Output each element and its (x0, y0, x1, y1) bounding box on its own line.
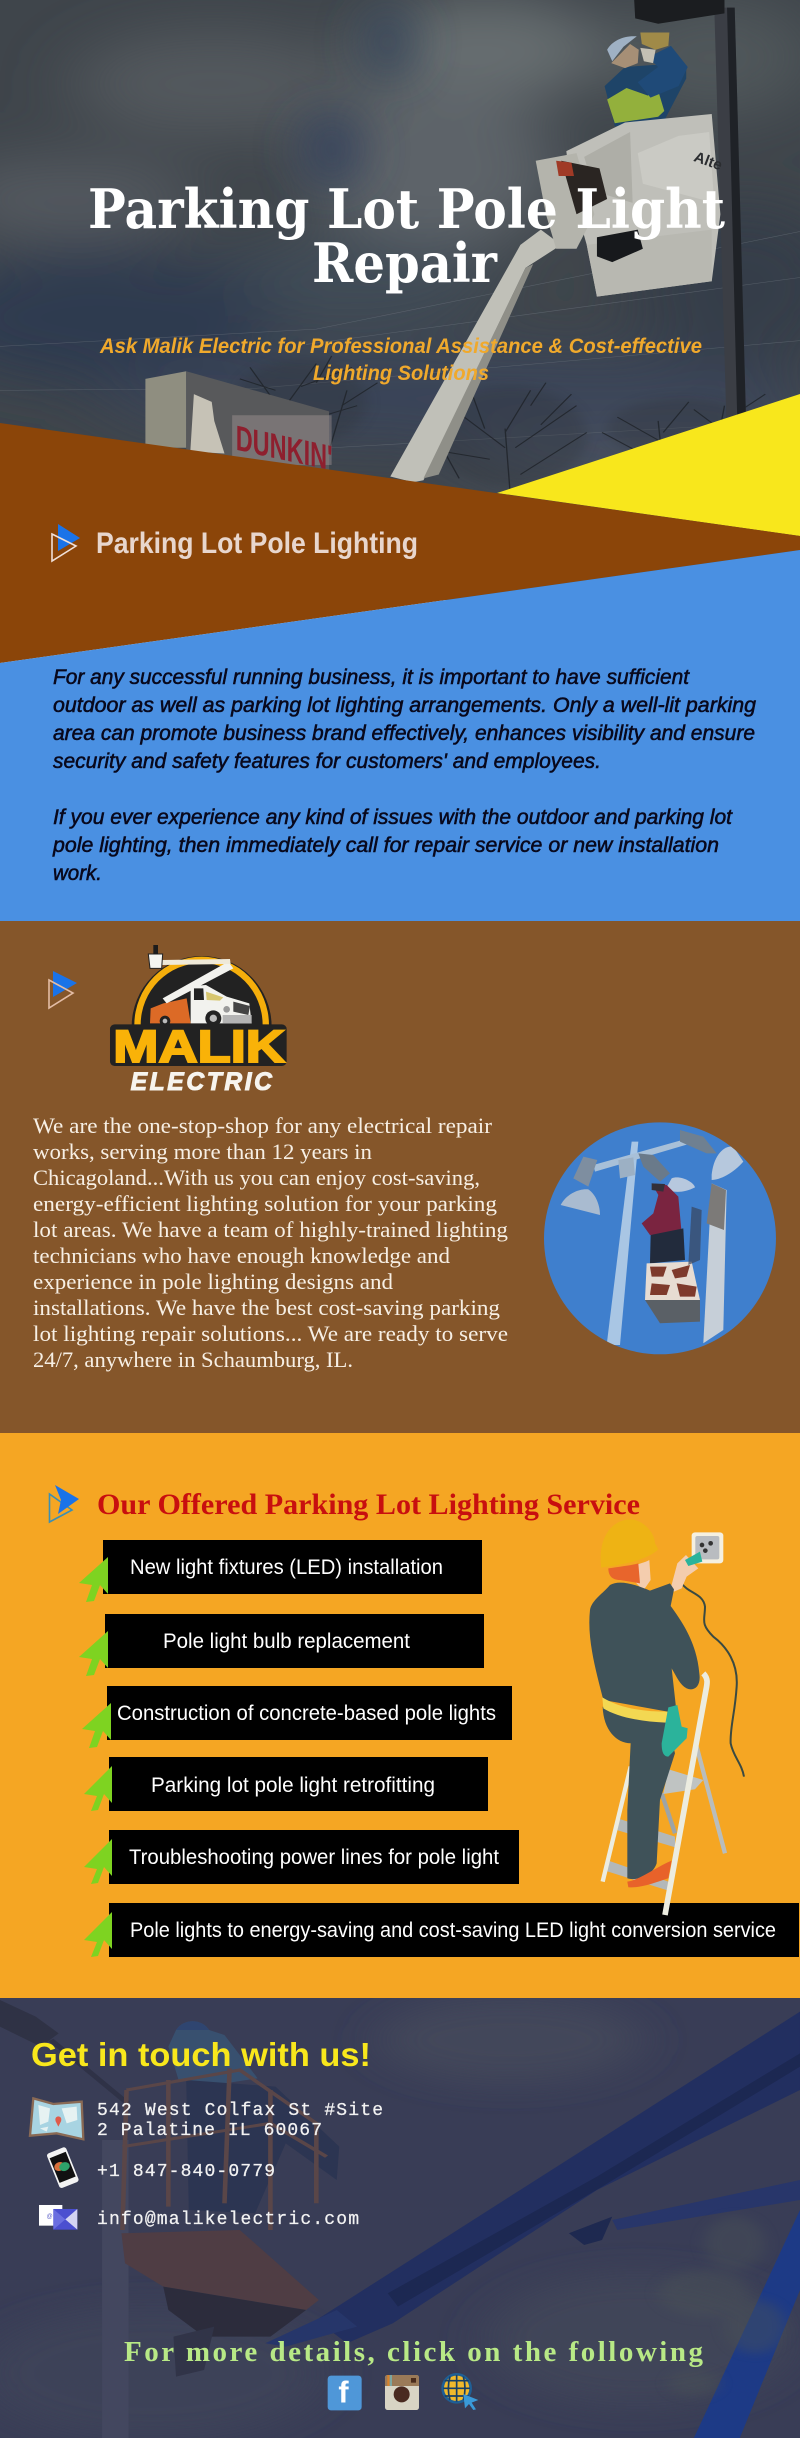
person (168, 2030, 258, 2083)
about text: works, serving more than 12 years in (33, 1139, 372, 1164)
subtitle: Ask Malik Electric for Professional Assistance & Cost-effective (99, 335, 702, 358)
icon: play arrow (50, 1485, 79, 1522)
wires (0, 232, 800, 448)
service item 2: Pole light bulb replacement (163, 1630, 410, 1653)
intro text: work. (53, 861, 102, 885)
social icons (328, 2373, 478, 2410)
outlet (692, 1532, 723, 1563)
subtitle: Lighting Solutions (313, 362, 489, 385)
intro text: area can promote business brand effectively, enhances visibility and ensure (53, 721, 755, 745)
worker (605, 65, 686, 126)
title: Repair (312, 231, 497, 295)
contact: email: info@malikelectric.com (97, 2210, 359, 2230)
illustration: electrician on ladder plugging into outlet (589, 1519, 744, 1915)
circular photo: technician at light pole (544, 1122, 776, 1354)
lamp arm (0, 2000, 59, 2047)
heading: offered service: Our Offered Parking Lot Lighting Service (97, 1488, 640, 1521)
intro text: pole lighting, then immediately call for repair service or new installation (52, 833, 719, 857)
service item 5: Troubleshooting power lines for pole light (129, 1846, 499, 1869)
service item 6 (84, 1903, 799, 1957)
intro text: security and safety features for customers' and employees. (53, 749, 601, 773)
panel: services (orange) (0, 1433, 800, 1998)
sign (145, 371, 186, 448)
jacket (589, 1583, 700, 1713)
lift bucket (566, 114, 720, 297)
service item 1: New light fixtures (LED) installation (130, 1556, 443, 1579)
icon: mail: @ (47, 2214, 53, 2220)
tree (716, 2226, 786, 2388)
icon: facebook (328, 2375, 362, 2410)
right strut (694, 2210, 800, 2438)
brown diagonal band (0, 423, 800, 663)
about text: installations. We have the best cost-saving parking (33, 1295, 500, 1320)
boom (316, 2012, 800, 2343)
service item 2 (79, 1614, 484, 1676)
hero photo: technician in a bucket lift repairing a parking lot light: Alte (691, 149, 725, 174)
service item 1 (79, 1540, 482, 1602)
hero photo: technician in a bucket lift repairing a parking lot light (0, 0, 800, 600)
service item 3 (82, 1686, 512, 1748)
icon: instagram (385, 2375, 419, 2410)
icon: globe with cursor (441, 2373, 478, 2410)
hero photo: technician in a bucket lift repairing a parking lot light: DUNKIN' (236, 418, 333, 478)
heading: get in touch: Get in touch with us! (31, 2036, 371, 2073)
pouch (662, 1705, 688, 1757)
boom arms (163, 962, 233, 1003)
contact: phone (46, 2146, 275, 2189)
contact: address: 542 West Colfax St #Site (97, 2101, 383, 2121)
bare trees (245, 364, 726, 482)
pole (714, 8, 737, 418)
about text: lot lighting repair solutions... We are ready to serve (33, 1321, 508, 1346)
hand and neck (671, 1555, 698, 1592)
panel: about (brown) (0, 921, 800, 1433)
legs (603, 1707, 675, 1879)
bucket frame (122, 2068, 327, 2230)
shoe (627, 1861, 672, 1887)
about text: Chicagoland...With us you can enjoy cost-saving, (33, 1165, 480, 1190)
about text: energy-efficient lighting solution for your parking (33, 1191, 497, 1216)
icon: play arrow (49, 971, 77, 1008)
about text: technicians who have enough knowledge and (33, 1243, 450, 1268)
contact: email (39, 2205, 359, 2230)
intro text: If you ever experience any kind of issues with the outdoor and parking lot (53, 805, 733, 829)
intro text (52, 665, 756, 885)
icon: play arrow (52, 524, 80, 561)
panel: contact footer with photo background (0, 1997, 800, 2438)
panel: intro (blue) (0, 524, 800, 921)
logo: malik electric (110, 945, 287, 1096)
service item 3: Construction of concrete-based pole lights (117, 1702, 496, 1725)
icon: mail (39, 2205, 77, 2230)
logo: malik electric: MALIK (113, 1021, 285, 1072)
pole (102, 2140, 129, 2438)
truck orange body (150, 998, 191, 1023)
contact: address: 2 Palatine IL 60067 (97, 2121, 322, 2141)
about text: 24/7, anywhere in Schaumburg, IL. (33, 1347, 353, 1372)
logo: malik electric: ELECTRIC (131, 1069, 273, 1096)
cab (191, 985, 252, 1023)
service item 5 (84, 1830, 519, 1884)
icon: facebook: f (338, 2375, 349, 2409)
about text: We are the one-stop-shop for any electrical repair (33, 1113, 493, 1138)
call to action text: For more details, click on the following (124, 2336, 704, 2368)
service item 4: Parking lot pole light retrofitting (151, 1774, 435, 1797)
boom (390, 230, 561, 482)
title (88, 177, 725, 295)
title: Parking Lot Pole Light (88, 177, 725, 241)
icon: map (30, 2098, 83, 2139)
about text (33, 1113, 508, 1372)
yellow triangle accent (497, 394, 800, 536)
subtitle (99, 335, 702, 385)
heading: parking lot pole lighting: Parking Lot Pole Lighting (96, 527, 418, 560)
intro text: outdoor as well as parking lot lighting arrangements. Only a well-lit parking (53, 693, 756, 717)
front ladder rail (665, 1673, 707, 1915)
cable (682, 1583, 744, 1777)
about text: experience in pole lighting designs and (33, 1269, 393, 1294)
intro text: For any successful running business, it is important to have sufficient (53, 665, 690, 689)
contact: phone: +1 847-840-0779 (97, 2162, 275, 2182)
lamp box (634, 0, 724, 24)
contact: address (30, 2098, 383, 2141)
service item 4 (84, 1757, 488, 1811)
about text: lot areas. We have a team of highly-trained lighting (33, 1217, 508, 1242)
icon: phone (46, 2146, 79, 2189)
belt (602, 1697, 667, 1723)
service item 6: Pole lights to energy-saving and cost-saving LED light conversion service (130, 1919, 776, 1942)
